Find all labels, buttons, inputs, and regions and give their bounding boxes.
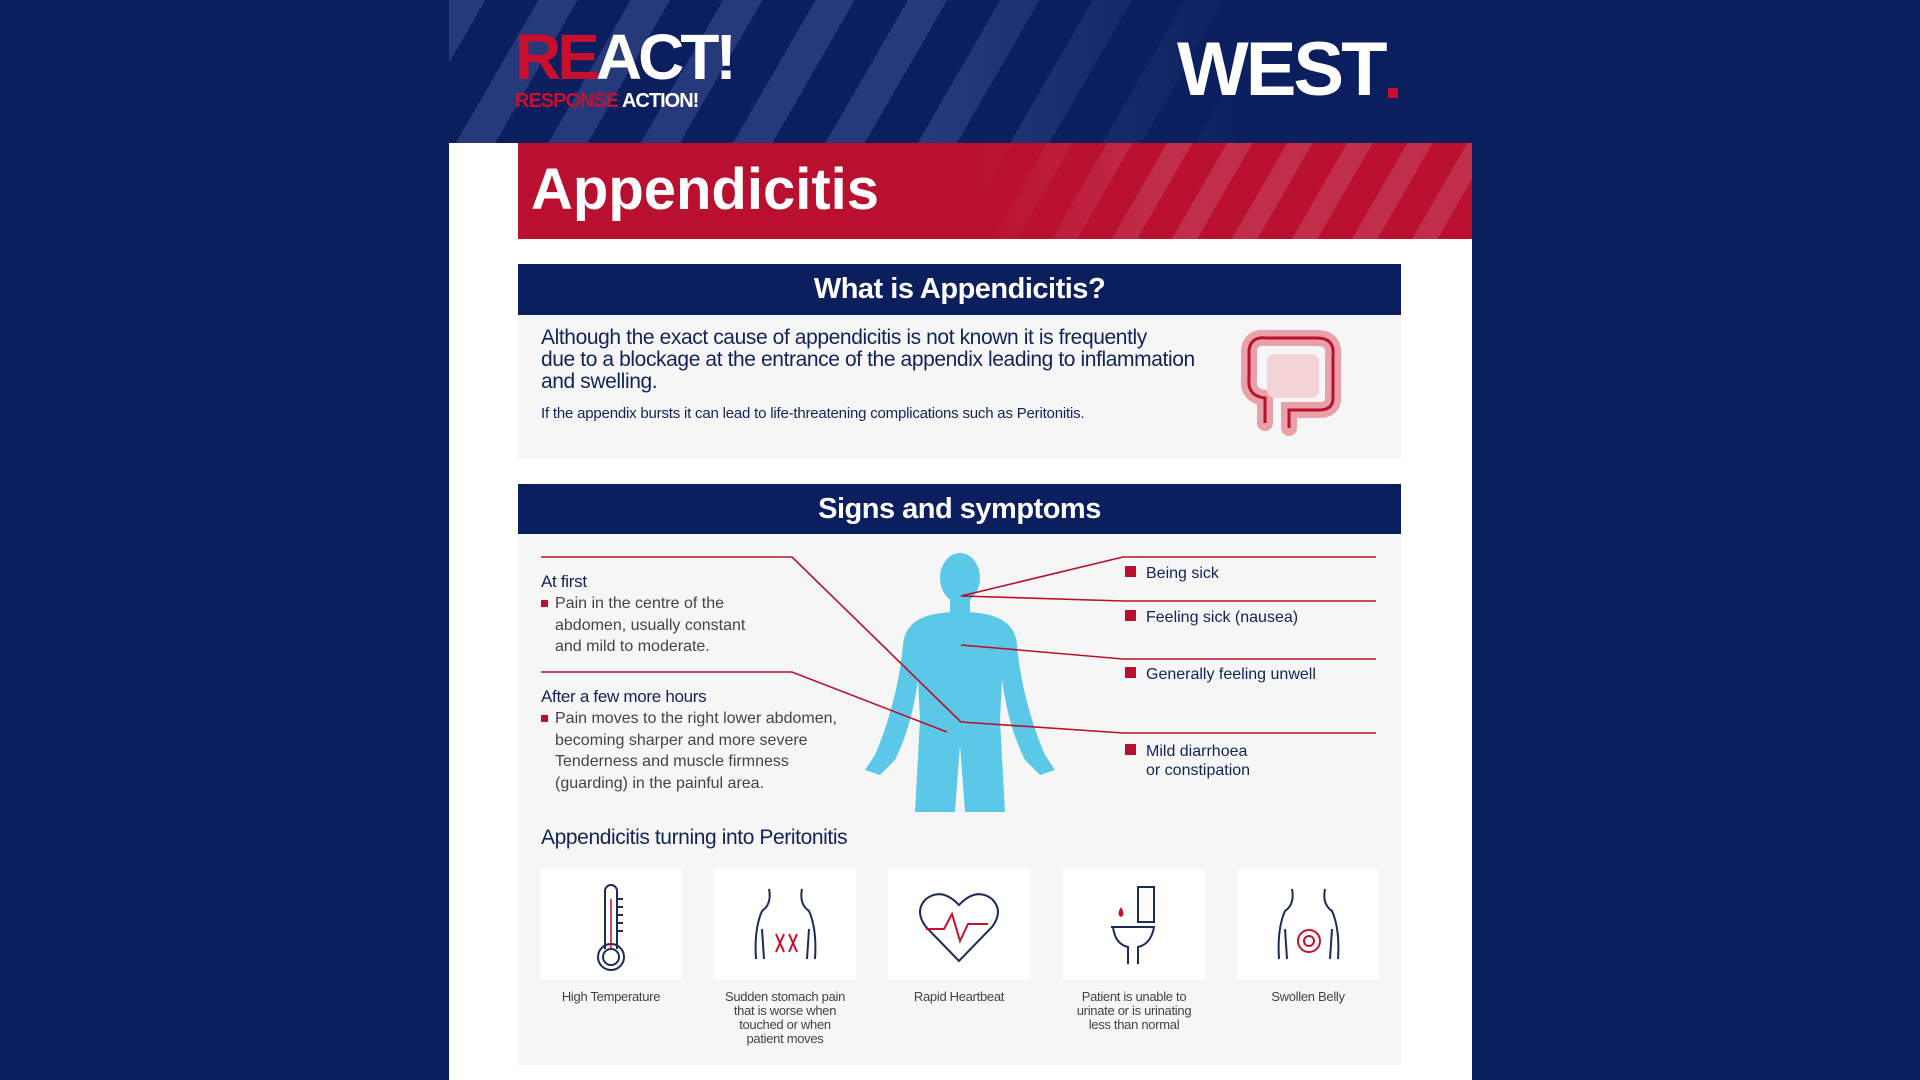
heading: Signs and symptoms: Signs and symptoms [818,493,1101,525]
heading: What is Appendicitis: What is Appendicitis? [814,273,1105,305]
label: high temperature: High Temperature [562,989,660,1004]
logo: REACT!: RESPONSE ACTION! [515,90,698,112]
panel: signs: Mild diarrhoea [1146,743,1247,760]
title: Appendicitis [531,157,879,222]
text block: after a few hours: After a few more hours [541,687,706,706]
text block: definition [541,326,1195,393]
logo: REACT!: REACT! [515,21,733,93]
white page [449,143,1472,1080]
card: high temperature [540,869,682,980]
card: stomach pain [714,869,856,980]
panel: signs: or constipation [1146,762,1250,779]
text block: complications: If the appendix bursts it can lead to life-threatening complications such as Peritonitis. [541,405,1084,422]
header banner [449,0,1472,143]
panel: signs: Feeling sick (nausea) [1146,609,1298,626]
card: heartbeat [888,869,1030,980]
list: right symptoms [1125,565,1316,779]
panel: signs: Being sick [1146,565,1219,582]
panel: signs: Generally feeling unwell [1146,666,1316,683]
icon: colon [1240,330,1342,436]
label: stomach pain: Sudden stomach pain that is worse when touched or when patient moves [725,989,845,1046]
text block: at first [541,572,746,655]
panel: what is [518,315,1401,459]
title bar [518,143,1472,239]
text block: definition: Although the exact cause of appendicitis is not known it is frequently [541,326,1147,349]
text block: definition: and swelling. [541,370,657,393]
card: urination [1063,869,1205,980]
card: swollen belly [1237,869,1379,980]
text block: after a few hours: Pain moves to the right lower abdomen, becoming sharper and more severe Tenderness and muscle firmness (guarding) in the painful area. [555,710,837,792]
panel: signs [518,534,1401,1065]
label: swollen belly: Swollen Belly [1271,989,1345,1004]
subheading: peritonitis: Appendicitis turning into Peritonitis [541,826,847,849]
text block: definition: due to a blockage at the entrance of the appendix leading to inflammation [541,348,1195,371]
illustration: body with pointer lines [541,553,1376,812]
heading: Signs and symptoms [518,484,1401,534]
label: urination: Patient is unable to urinate or is urinating less than normal [1077,989,1191,1032]
label: heartbeat: Rapid Heartbeat [914,989,1004,1004]
logo: WEST: WEST [1177,27,1385,112]
heading: What is Appendicitis [518,264,1401,315]
text block: at first: Pain in the centre of the abdomen, usually constant and mild to moderate. [555,595,745,655]
text block: at first: At first [541,572,587,591]
